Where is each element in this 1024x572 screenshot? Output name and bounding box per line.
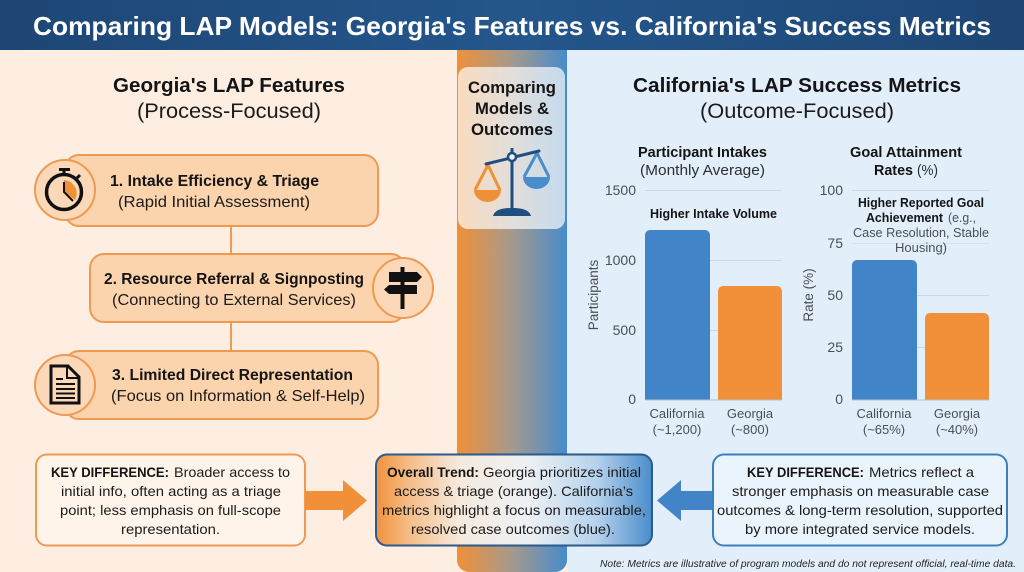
callout: California key difference <box>713 454 1007 546</box>
bar chart: participant intakes <box>586 145 782 437</box>
feature 1 text: 1. Intake Efficiency & Triage <box>110 173 319 190</box>
y axis ticks <box>820 182 843 407</box>
center card heading: Models & <box>475 99 549 118</box>
y axis ticks: 0 <box>835 391 843 407</box>
y axis ticks: 75 <box>827 235 843 251</box>
callout: Georgia key difference: point; less emphasis on full-scope <box>60 502 281 518</box>
annotation: Higher Intake Volume <box>650 207 777 221</box>
panel: Georgia heading <box>113 75 345 123</box>
panel: California heading: California's LAP Success Metrics <box>633 75 961 97</box>
feature 2: resource referral <box>90 254 433 322</box>
y axis ticks <box>605 182 636 407</box>
x axis labels: California <box>650 406 705 421</box>
y axis ticks: 100 <box>820 182 843 198</box>
y axis label: Rate (%) <box>801 268 816 322</box>
bar: California <box>645 230 710 400</box>
bar chart: goal attainment <box>801 145 989 437</box>
callout: overall trend: Georgia prioritizes initial <box>483 464 641 480</box>
center gradient band <box>457 50 567 572</box>
callout: Georgia key difference: representation. <box>121 521 220 537</box>
panel: Georgia heading: (Process-Focused) <box>137 100 321 123</box>
x axis labels: California <box>857 406 912 421</box>
chart title <box>850 145 962 179</box>
y axis ticks: 1500 <box>605 182 636 198</box>
callout: California key difference: Metrics reflect a <box>869 464 974 480</box>
feature 3 text: 3. Limited Direct Representation <box>112 367 353 384</box>
feature 3 text: (Focus on Information & Self-Help) <box>111 388 365 405</box>
y axis ticks: 50 <box>827 287 843 303</box>
center card: comparing models <box>458 67 565 229</box>
annotation: Case Resolution, Stable <box>853 226 989 240</box>
callout: overall trend: Overall Trend: <box>387 464 479 480</box>
feature 3: limited representation <box>35 351 378 419</box>
callout: California key difference: KEY DIFFERENCE: <box>747 464 864 480</box>
icon: balance scale <box>474 148 550 216</box>
center card heading: Outcomes <box>471 120 553 139</box>
feature 1 text <box>110 173 319 211</box>
feature 2 text: (Connecting to External Services) <box>112 292 356 309</box>
bar: California <box>852 260 917 400</box>
title banner <box>0 0 1024 50</box>
annotation: Higher Reported Goal <box>858 196 984 210</box>
feature 3 text <box>111 367 365 405</box>
y axis ticks: 25 <box>827 339 843 355</box>
annotation <box>853 196 989 255</box>
callout: Georgia key difference <box>36 454 305 546</box>
feature 2 text <box>104 271 364 309</box>
chart title: Rates <box>874 163 913 179</box>
callout: Georgia key difference: initial info, often acting as a triage <box>61 483 281 499</box>
annotation: Achievement <box>866 211 944 225</box>
center card heading <box>468 78 556 139</box>
center card heading: Comparing <box>468 78 556 97</box>
connector lines <box>230 226 232 351</box>
x axis labels: (~800) <box>731 422 769 437</box>
callout: California key difference: outcomes & long-term resolution, supported <box>717 502 1003 518</box>
right background panel <box>567 50 1024 572</box>
x axis labels: (~65%) <box>863 422 905 437</box>
panel: Georgia heading: Georgia's LAP Features <box>113 75 345 97</box>
icon: stopwatch <box>35 160 95 220</box>
x axis labels <box>857 406 981 437</box>
note: Note: Metrics are illustrative of program models and do not represent official, real-time data. <box>600 558 1016 570</box>
icon: signpost <box>373 258 433 318</box>
left background panel <box>0 50 457 572</box>
arrow: orange to center <box>305 480 367 521</box>
chart title: (Monthly Average) <box>640 163 765 179</box>
annotation: (e.g., <box>948 211 976 225</box>
y axis ticks: 0 <box>628 391 636 407</box>
callout: overall trend: resolved case outcomes (blue). <box>411 521 615 537</box>
feature 1 text: (Rapid Initial Assessment) <box>118 194 310 211</box>
chart title <box>638 145 767 179</box>
chart title: Goal Attainment <box>850 145 962 161</box>
y axis ticks: 1000 <box>605 252 636 268</box>
x axis labels: (~1,200) <box>653 422 701 437</box>
panel: California heading: (Outcome-Focused) <box>700 100 894 123</box>
bar: Georgia <box>718 286 782 400</box>
callout: California key difference: stronger emphasis on measurable case <box>732 483 989 499</box>
callout: overall trend: metrics highlight a focus on measurable, <box>382 502 646 518</box>
feature 1: intake efficiency <box>35 155 378 226</box>
y axis label: Participants <box>586 259 601 330</box>
x axis labels: (~40%) <box>936 422 978 437</box>
chart title: Participant Intakes <box>638 145 767 161</box>
title: Comparing LAP Models: Georgia's Features vs. California's Success Metrics <box>33 11 991 41</box>
callout: overall trend <box>376 454 652 546</box>
feature 2 text: 2. Resource Referral & Signposting <box>104 271 364 288</box>
arrow: blue to center <box>657 480 714 521</box>
x axis labels <box>650 406 774 437</box>
callout: Georgia key difference: Broader access to <box>174 464 290 480</box>
callout: overall trend: access & triage (orange). California’s <box>394 483 633 499</box>
chart title: (%) <box>917 163 938 179</box>
x axis labels: Georgia <box>934 406 981 421</box>
icon: document <box>35 355 95 415</box>
x axis labels: Georgia <box>727 406 774 421</box>
bar: Georgia <box>925 313 989 400</box>
callout: Georgia key difference: KEY DIFFERENCE: <box>51 464 169 480</box>
annotation: Housing) <box>895 241 947 255</box>
panel: California heading <box>633 75 961 123</box>
callout: California key difference: by more integrated service models. <box>745 521 975 537</box>
y axis ticks: 500 <box>613 322 636 338</box>
